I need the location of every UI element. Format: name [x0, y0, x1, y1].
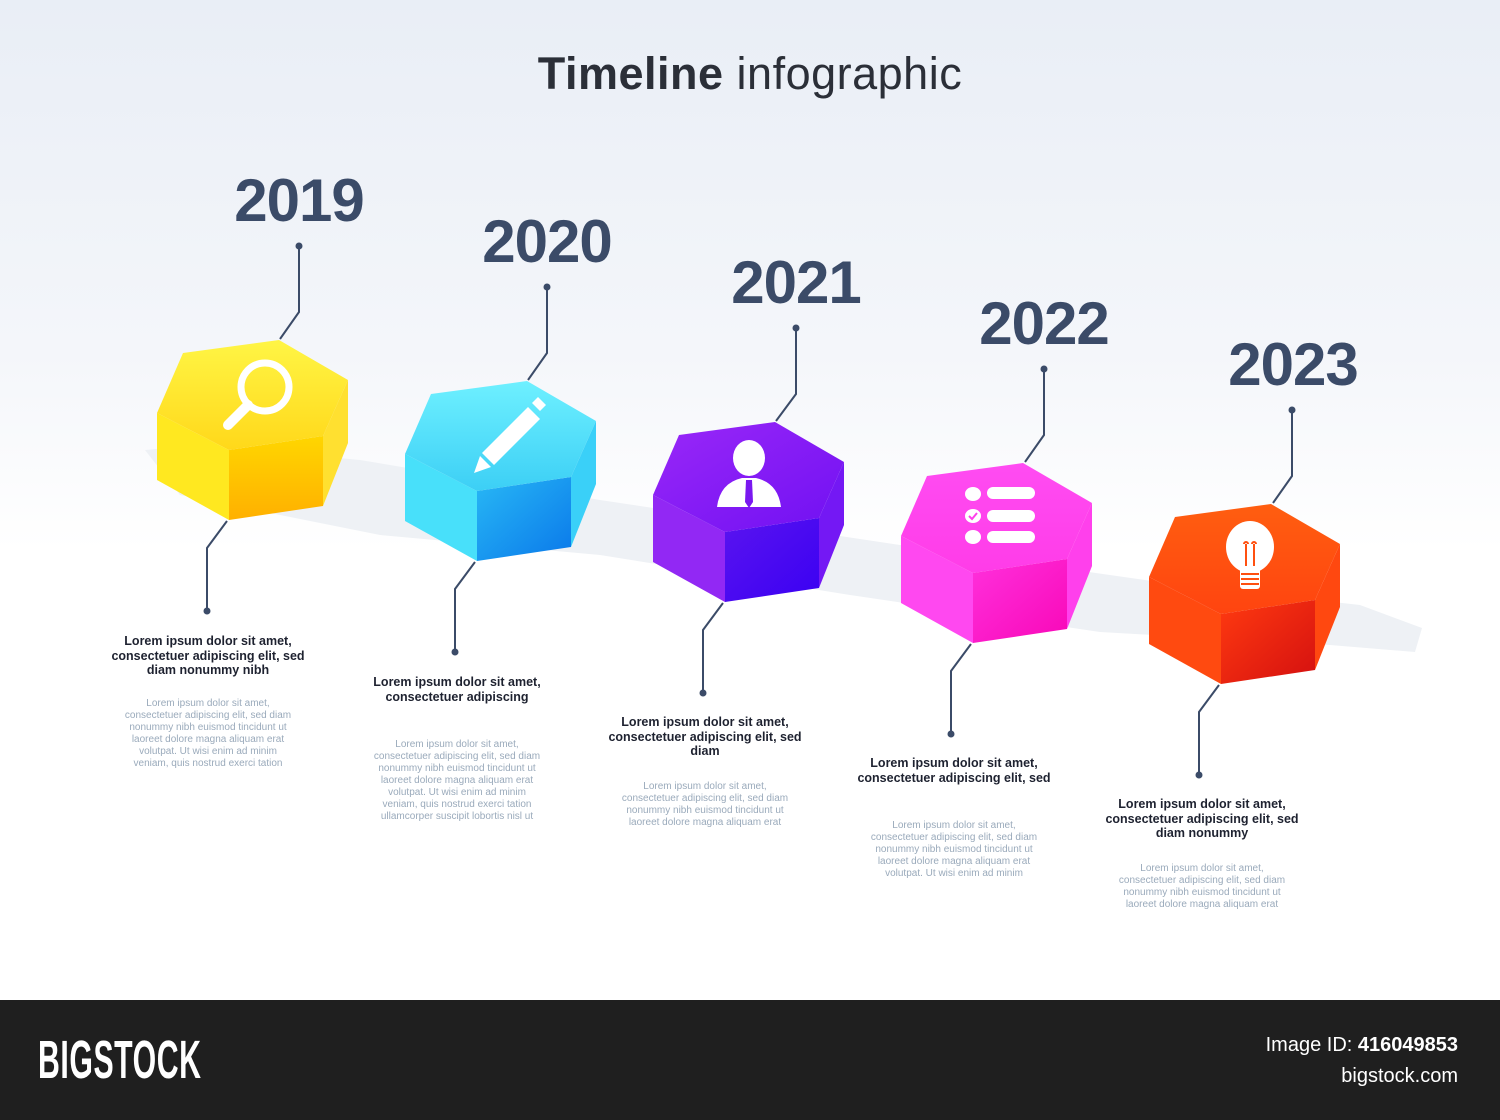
- text block 2023: [1105, 797, 1299, 910]
- footer image id: Image ID: 416049853: [1266, 1034, 1458, 1056]
- footer image id: [1266, 1034, 1458, 1087]
- hexagon 2021: [653, 422, 844, 602]
- connectors: [207, 246, 1292, 775]
- icon: checklist: [965, 487, 1035, 544]
- hexagon 2023: [1149, 504, 1340, 684]
- text block 2019: consectetuer adipiscing elit, sed: [111, 648, 305, 662]
- text block 2020: laoreet dolore magna aliquam erat: [381, 775, 533, 786]
- text block 2021: consectetuer adipiscing elit, sed diam: [622, 792, 788, 804]
- text block 2021: nonummy nibh euismod tincidunt ut: [626, 804, 784, 816]
- text block 2020: Lorem ipsum dolor sit amet,: [395, 739, 519, 750]
- text block 2020: ullamcorper suscipit lobortis nisl ut: [381, 811, 533, 822]
- text block 2020: nonummy nibh euismod tincidunt ut: [378, 763, 536, 774]
- text block 2022: Lorem ipsum dolor sit amet,: [892, 820, 1016, 831]
- text block 2022: [857, 756, 1051, 879]
- text block 2019: nonummy nibh euismod tincidunt ut: [129, 722, 287, 732]
- text block 2020: volutpat. Ut wisi enim ad minim: [388, 787, 526, 798]
- year 2022: 2022: [979, 290, 1109, 357]
- text block 2023: laoreet dolore magna aliquam erat: [1126, 898, 1278, 910]
- text block 2019: [111, 634, 305, 768]
- text block 2022: nonummy nibh euismod tincidunt ut: [875, 844, 1033, 855]
- text block 2023: consectetuer adipiscing elit, sed: [1105, 812, 1299, 826]
- text block 2021: [608, 715, 802, 828]
- text block 2019: volutpat. Ut wisi enim ad minim: [139, 746, 277, 756]
- year 2021: 2021: [731, 249, 861, 316]
- text block 2023: Lorem ipsum dolor sit amet,: [1118, 797, 1286, 811]
- text block 2022: laoreet dolore magna aliquam erat: [878, 856, 1030, 867]
- text block 2019: consectetuer adipiscing elit, sed diam: [125, 710, 291, 720]
- text block 2019: veniam, quis nostrud exerci tation: [134, 758, 282, 768]
- text block 2019: diam nonummy nibh: [147, 663, 269, 677]
- footer image id: bigstock.com: [1341, 1065, 1458, 1087]
- text block 2020: [373, 675, 541, 822]
- text block 2020: Lorem ipsum dolor sit amet,: [373, 675, 541, 689]
- icon: magnifier: [228, 363, 289, 425]
- text block 2023: diam nonummy: [1156, 826, 1248, 840]
- footer: [0, 1000, 1500, 1120]
- shadow band: [145, 445, 1422, 652]
- text block 2020: veniam, quis nostrud exerci tation: [383, 799, 531, 810]
- hexagon 2019: [157, 340, 348, 520]
- year 2019: 2019: [234, 167, 364, 234]
- footer logo: BIGSTOCK: [38, 1030, 202, 1090]
- year 2020: 2020: [482, 208, 612, 275]
- text block 2021: laoreet dolore magna aliquam erat: [629, 816, 781, 828]
- text block 2023: Lorem ipsum dolor sit amet,: [1140, 862, 1264, 874]
- text block 2020: consectetuer adipiscing elit, sed diam: [374, 751, 540, 762]
- text block 2022: consectetuer adipiscing elit, sed diam: [871, 832, 1037, 843]
- icon: light bulb: [1226, 521, 1274, 589]
- text block 2021: Lorem ipsum dolor sit amet,: [643, 780, 767, 792]
- text block 2022: Lorem ipsum dolor sit amet,: [870, 756, 1038, 770]
- title: Timeline infographic: [538, 48, 962, 99]
- text block 2022: consectetuer adipiscing elit, sed: [857, 770, 1051, 784]
- text block 2019: Lorem ipsum dolor sit amet,: [146, 698, 270, 708]
- text block 2021: diam: [690, 744, 720, 758]
- icon: person: [717, 440, 781, 508]
- text block 2023: consectetuer adipiscing elit, sed diam: [1119, 874, 1285, 886]
- text block 2020: consectetuer adipiscing: [385, 690, 529, 704]
- year 2023: 2023: [1228, 331, 1358, 398]
- text block 2022: volutpat. Ut wisi enim ad minim: [885, 868, 1023, 879]
- text block 2019: Lorem ipsum dolor sit amet,: [124, 634, 292, 648]
- hexagon 2022: [901, 463, 1092, 643]
- text block 2019: laoreet dolore magna aliquam erat: [132, 734, 284, 744]
- icon: pencil: [474, 397, 546, 473]
- hexagon 2020: [405, 381, 596, 561]
- text block 2023: nonummy nibh euismod tincidunt ut: [1123, 886, 1281, 898]
- text block 2021: Lorem ipsum dolor sit amet,: [621, 715, 789, 729]
- text block 2021: consectetuer adipiscing elit, sed: [608, 730, 802, 744]
